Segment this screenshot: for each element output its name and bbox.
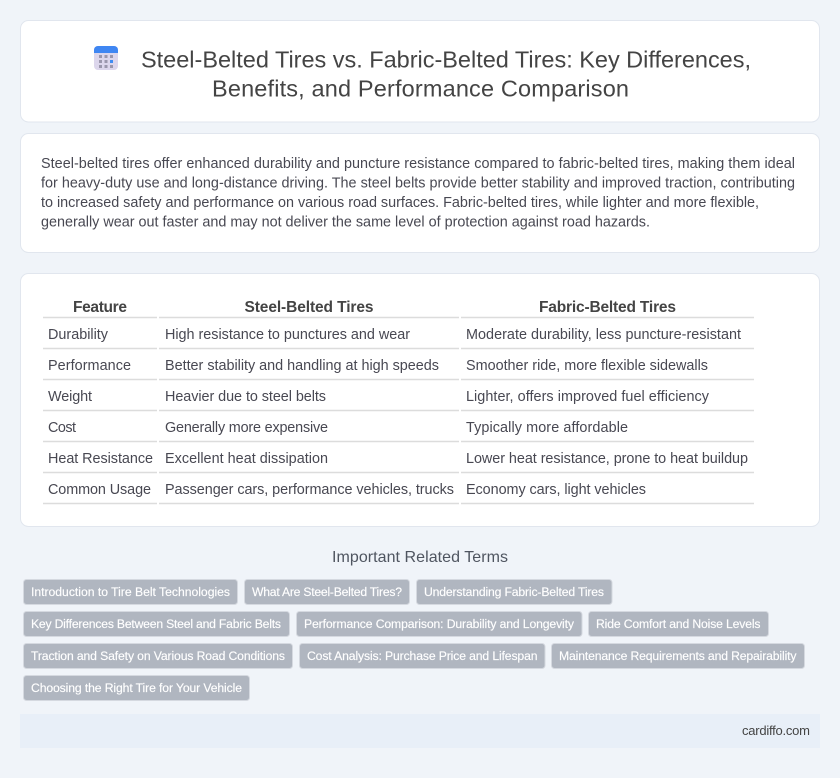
related terms tags: Maintenance Requirements and Repairability [559, 649, 797, 663]
icon: calendar [94, 46, 118, 70]
text block: introduction paragraph: generally wear out faster and may not deliver the same level of protection against road hazards. [41, 214, 650, 230]
title: Benefits, and Performance Comparison [212, 75, 629, 101]
footer: cardiffo.com [742, 723, 810, 738]
text block: introduction paragraph: to increased safety and performance on various road surfaces. Fabric-belted tires, while lighter and more flexible, [41, 195, 759, 211]
row: performance: Better stability and handling at high speeds [165, 358, 439, 374]
row: common usage [48, 482, 646, 498]
row: heat resistance [48, 451, 748, 467]
related terms tags: Performance Comparison: Durability and Longevity [304, 617, 575, 631]
row: durability [48, 327, 741, 343]
related terms tags: What Are Steel-Belted Tires? [252, 585, 402, 599]
text block: introduction paragraph [41, 156, 795, 230]
related terms tags: Key Differences Between Steel and Fabric Belts [31, 617, 281, 631]
row: common usage: Common Usage [48, 482, 151, 498]
text block: introduction paragraph: Steel-belted tires offer enhanced durability and puncture resistance compared to fabric-belted tires, making them ideal [41, 156, 795, 172]
table header [73, 299, 676, 316]
table header: Feature [73, 299, 127, 316]
row: performance [48, 358, 708, 374]
row: heat resistance: Lower heat resistance, prone to heat buildup [466, 451, 748, 467]
table header: Fabric-Belted Tires [539, 299, 676, 316]
related terms tags [24, 580, 804, 700]
row: weight: Lighter, offers improved fuel efficiency [466, 389, 710, 405]
row: cost: Typically more affordable [466, 420, 628, 436]
row: heat resistance: Heat Resistance [48, 451, 153, 467]
row: common usage: Economy cars, light vehicles [466, 482, 646, 498]
row: weight [48, 389, 710, 405]
row: cost: Generally more expensive [165, 420, 328, 436]
footer [20, 714, 820, 748]
table header: Steel-Belted Tires [244, 299, 374, 316]
row: cost: Cost [48, 420, 76, 436]
row: weight: Heavier due to steel belts [165, 389, 326, 405]
row: heat resistance: Excellent heat dissipation [165, 451, 328, 467]
heading: important related terms: Important Related Terms [332, 549, 508, 566]
related terms tags: Choosing the Right Tire for Your Vehicle [31, 681, 242, 695]
panel: comparison table [20, 274, 820, 526]
row: cost [48, 420, 628, 436]
row: durability: High resistance to punctures and wear [165, 327, 410, 343]
related terms tags: Traction and Safety on Various Road Conditions [31, 649, 285, 663]
related terms tags: Ride Comfort and Noise Levels [596, 617, 760, 631]
related terms tags: Understanding Fabric-Belted Tires [424, 585, 604, 599]
panel: introduction [20, 134, 820, 252]
related terms tags: Cost Analysis: Purchase Price and Lifespan [307, 649, 538, 663]
title [141, 46, 751, 101]
row: performance: Performance [48, 358, 131, 374]
title: Steel-Belted Tires vs. Fabric-Belted Tires: Key Differences, [141, 46, 751, 72]
text block: introduction paragraph: for heavy-duty use and long-distance driving. The steel belts provide better stability and improved traction, contributing [41, 176, 795, 192]
related terms tags: Introduction to Tire Belt Technologies [31, 585, 230, 599]
row: common usage: Passenger cars, performance vehicles, trucks [165, 482, 454, 498]
row: durability: Moderate durability, less puncture-resistant [466, 327, 741, 343]
panel: header [20, 20, 820, 122]
row: performance: Smoother ride, more flexible sidewalls [466, 358, 708, 374]
row: weight: Weight [48, 389, 92, 405]
row: durability: Durability [48, 327, 109, 343]
